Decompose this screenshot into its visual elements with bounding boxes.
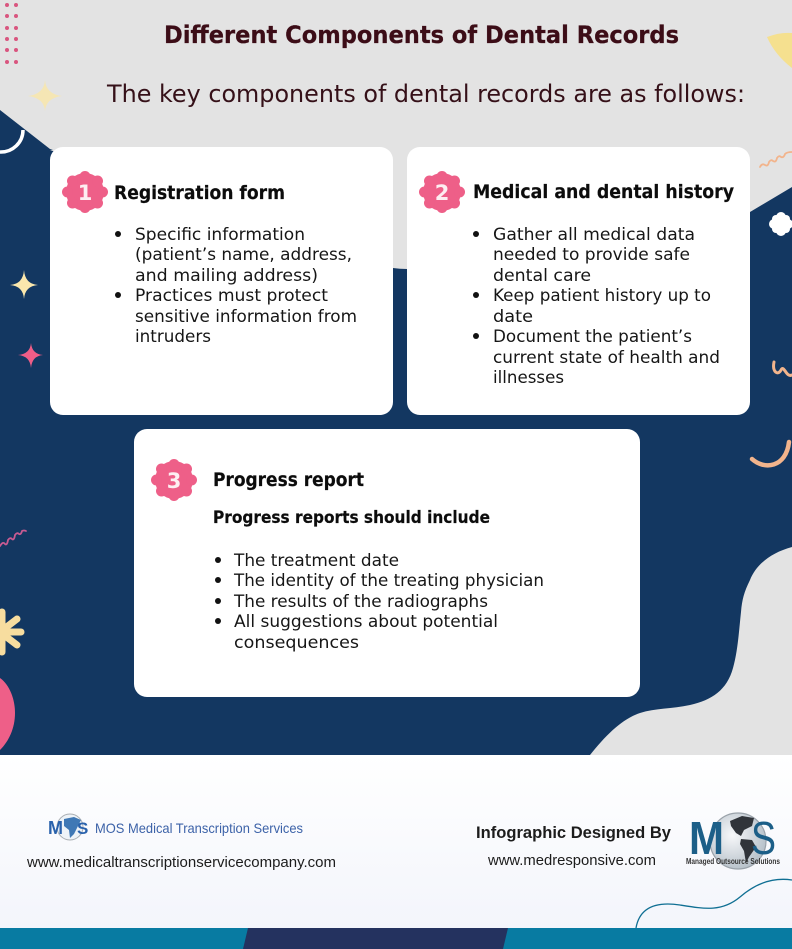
heading: registration form: Registration form — [114, 182, 285, 204]
bullet list: The results of the radiographs — [233, 592, 488, 612]
icon: sparkle light — [10, 270, 38, 299]
website: medresponsive: www.medresponsive.com — [487, 853, 656, 869]
heading: progress report: Progress report — [213, 469, 364, 491]
title: Different Components of Dental Records — [164, 21, 679, 49]
bullet list: sensitive information from — [135, 307, 357, 327]
bullet list: consequences — [234, 633, 359, 653]
bullet list: illnesses — [493, 368, 564, 388]
footer wave line — [636, 879, 792, 928]
icon: number badge 1: 1 — [78, 181, 92, 205]
logo: MOS Medical Transcription Services: M — [48, 818, 63, 838]
bullet list: Practices must protect — [135, 286, 328, 306]
bullet list: The identity of the treating physician — [233, 571, 544, 591]
bullet list: dental care — [493, 266, 591, 286]
logo: Managed Outsource Solutions: S — [751, 812, 776, 864]
panel: medical and dental history — [407, 147, 750, 415]
bullet list: All suggestions about potential — [234, 612, 498, 632]
icon: yellow leaf shape — [767, 33, 792, 68]
icon: orange squiggle top right — [760, 152, 792, 167]
subtitle: The key components of dental records are as follows: — [106, 80, 745, 108]
icon: pink circle — [0, 678, 15, 750]
background panel — [0, 0, 792, 755]
bullet list: The treatment date — [233, 551, 399, 571]
bullet list: current state of health and — [493, 348, 720, 368]
icon: yellow asterisk — [0, 612, 21, 652]
website: medical transcription: www.medicaltranscriptionservicecompany.com — [26, 855, 336, 871]
bullet list: Gather all medical data — [493, 225, 695, 245]
bullet list: date — [493, 307, 533, 327]
bullet list — [215, 551, 544, 653]
bullet list — [473, 225, 720, 388]
icon: orange smile arc — [752, 442, 789, 465]
bullet list: and mailing address) — [135, 266, 318, 286]
logo: Managed Outsource Solutions: M — [689, 812, 724, 864]
icon: number badge 2 — [419, 171, 465, 213]
subheading: Progress reports should include — [213, 508, 490, 528]
icon: number badge 3 — [151, 459, 197, 501]
icon: white ring — [0, 130, 23, 152]
decorative dots — [5, 3, 18, 64]
icon: pink sparkle — [18, 343, 43, 368]
icon: number badge 2: 2 — [435, 181, 449, 205]
logo: MOS Medical Transcription Services: S — [77, 819, 88, 838]
logo: MOS Medical Transcription Services — [48, 814, 303, 840]
panel: registration form — [50, 147, 393, 415]
bullet list: (patient’s name, address, — [135, 245, 352, 265]
icon: orange squiggle right — [774, 362, 792, 375]
icon: number badge 3: 3 — [167, 469, 181, 493]
bullet list — [115, 225, 357, 347]
footer band — [0, 928, 792, 949]
icon: number badge 1 — [62, 171, 108, 213]
designer credit: Infographic Designed By — [476, 823, 672, 842]
bullet list: Document the patient’s — [493, 327, 692, 347]
icon: white flower — [769, 212, 792, 236]
bullet list: Keep patient history up to — [493, 286, 711, 306]
heading: medical and dental history: Medical and dental history — [473, 181, 735, 203]
bullet list: Specific information — [135, 225, 305, 245]
icon: pale yellow sparkle — [28, 80, 62, 111]
icon: pink squiggle left — [0, 530, 26, 546]
panel: progress report — [134, 429, 640, 697]
bullet list: needed to provide safe — [493, 245, 690, 265]
logo: MOS Medical Transcription Services: MOS Medical Transcription Services — [95, 820, 303, 836]
bullet list: intruders — [135, 327, 211, 347]
footer background — [0, 755, 792, 929]
logo: Managed Outsource Solutions — [686, 812, 780, 869]
